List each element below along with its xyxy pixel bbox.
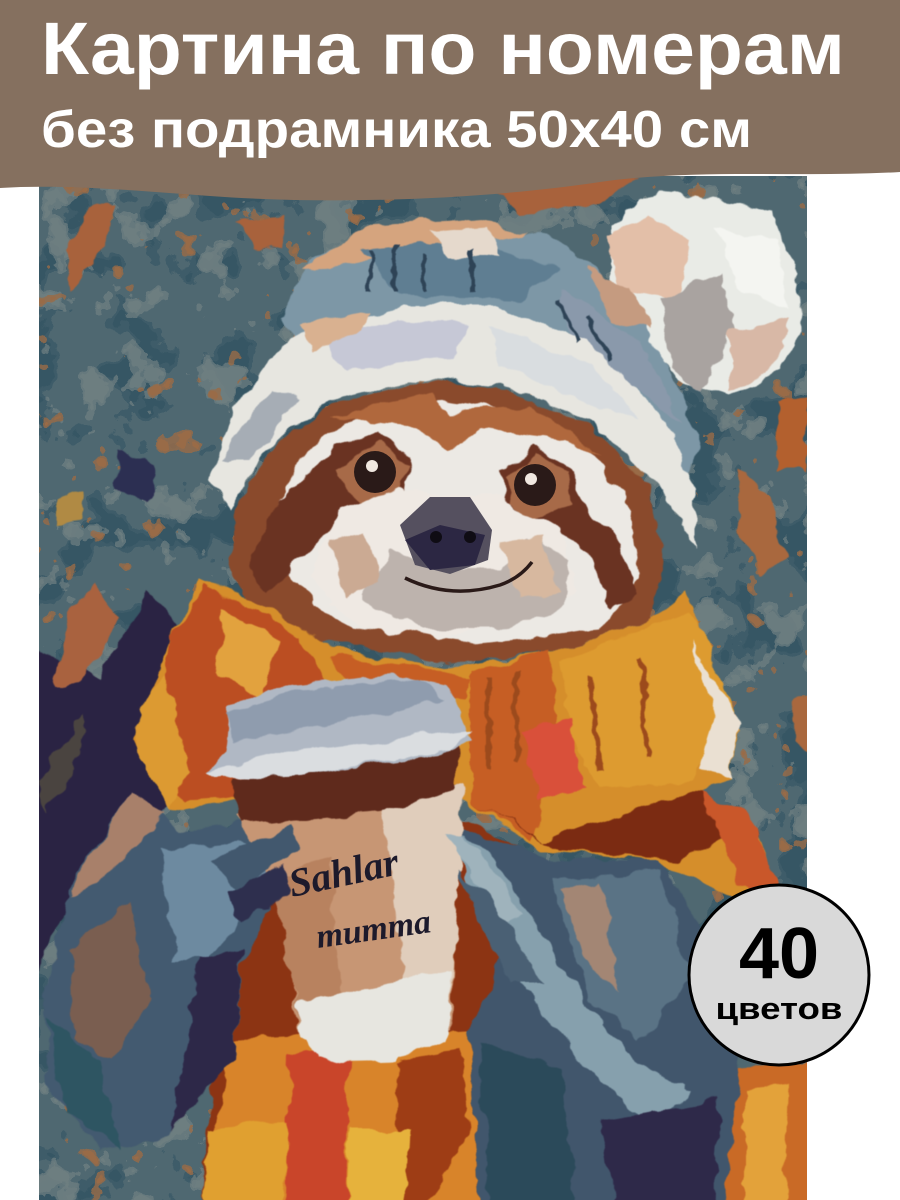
painting: coffee cup: [205, 675, 472, 1060]
painting background: leaves and shadow: [20, 178, 815, 1010]
painting: right arm: [445, 830, 740, 1200]
title: Картина по номерам: [41, 7, 845, 90]
painting background: autumn mottling: [39, 176, 807, 1200]
painting: cup lettering: [292, 854, 430, 948]
badge: 40 colours: 40: [739, 914, 819, 994]
painting: pompom: [605, 190, 803, 395]
painting: body scarf lower: [200, 820, 830, 1200]
painting: right eye patch: [500, 445, 640, 610]
painting: smile: [405, 562, 532, 591]
painting: sloth with coffee: [20, 176, 830, 1200]
painting: muzzle: [310, 490, 578, 640]
painting: fingers on cup: [210, 825, 540, 980]
painting: knitted hat: [210, 218, 700, 550]
badge: 40 colours: [689, 885, 869, 1065]
subtitle: без подрамника 50х40 см: [41, 101, 752, 159]
painting: nose: [400, 497, 492, 574]
painting: eyes: [354, 451, 556, 506]
painting: sloth head: [232, 380, 665, 660]
painting: cup lettering: mumma: [314, 903, 433, 956]
painting: cup lettering: Sahlar: [285, 839, 403, 906]
header banner: [0, 0, 900, 200]
painting: left arm: [42, 790, 290, 1150]
badge: 40 colours: цветов: [716, 991, 842, 1026]
painting figure: [20, 178, 830, 1200]
painting: left eye patch: [250, 432, 410, 590]
painting: scarf: [135, 580, 790, 920]
